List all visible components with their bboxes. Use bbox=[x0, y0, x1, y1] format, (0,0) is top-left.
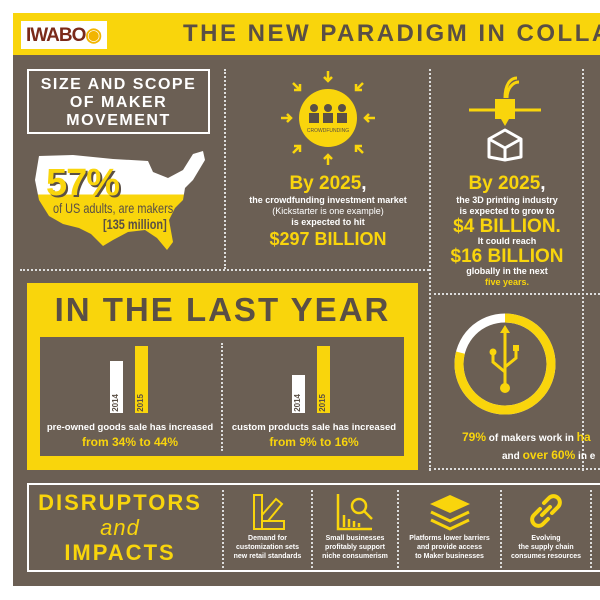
US map with stat bbox=[35, 151, 205, 250]
item: customization: customization sets bbox=[236, 544, 299, 551]
bar chart: custom products: 2014 bbox=[293, 394, 302, 412]
item: supply chain: consumes resources bbox=[511, 553, 581, 560]
item: customization: new retail standards bbox=[234, 553, 301, 560]
inner bar charts: from 34% to 44% bbox=[82, 435, 178, 449]
logo bbox=[21, 21, 107, 49]
heading: and bbox=[100, 515, 140, 540]
item: platforms: and provide access bbox=[417, 544, 482, 551]
bar chart: custom products bbox=[292, 375, 305, 413]
header bar bbox=[13, 13, 600, 55]
text: crowdfunding stat bbox=[249, 173, 407, 249]
text: crowdfunding stat: the crowdfunding investment market bbox=[249, 195, 407, 205]
heading: DISRUPTORS bbox=[38, 490, 202, 515]
text: 3D printing stat bbox=[450, 173, 563, 287]
title: THE NEW PARADIGM IN COLLA bbox=[183, 20, 600, 47]
text: crowdfunding stat: By 2025, bbox=[289, 173, 367, 194]
donut chart: USB bbox=[454, 314, 556, 414]
US map with stat: of US adults, are makers bbox=[53, 200, 173, 216]
text: makers stat: and over 60% in e bbox=[502, 448, 595, 462]
text: 3D printing stat: $4 BILLION. bbox=[453, 216, 561, 237]
inner bar charts: 2015 bbox=[136, 394, 145, 412]
item: supply chain bbox=[511, 494, 581, 560]
text: crowdfunding stat: is expected to hit bbox=[291, 217, 365, 227]
item: customization: Demand for bbox=[248, 535, 287, 542]
US map with stat: 57% bbox=[46, 162, 119, 204]
US map with stat: [135 million] bbox=[103, 216, 167, 232]
item: platforms: Platforms lower barriers bbox=[409, 535, 490, 542]
text: makers stat: 79% of makers work in ha bbox=[462, 430, 591, 444]
icon: 3D printer bbox=[469, 76, 541, 162]
inner bar charts: pre-owned goods sale has increased bbox=[47, 422, 213, 433]
item: supply chain: the supply chain bbox=[518, 544, 574, 551]
item: small businesses: profitably support bbox=[325, 544, 385, 551]
item: small businesses bbox=[322, 494, 388, 560]
item: supply chain: Evolving bbox=[531, 535, 561, 542]
item: platforms: to Maker businesses bbox=[415, 553, 484, 560]
text: 3D printing stat: $16 BILLION bbox=[450, 246, 563, 267]
text: 3D printing stat: five years. bbox=[485, 277, 529, 287]
panel: disruptors and impacts bbox=[27, 483, 600, 572]
heading box: size and scope: SIZE AND SCOPE bbox=[41, 76, 196, 93]
heading box: size and scope: MOVEMENT bbox=[66, 112, 171, 129]
heading box: size and scope bbox=[27, 69, 210, 134]
item: customization bbox=[234, 494, 301, 560]
item: platforms bbox=[409, 495, 490, 560]
bar chart: pre-owned bbox=[110, 361, 123, 413]
text: 3D printing stat: is expected to grow to It could reach globally in the next bbox=[459, 206, 554, 276]
inner bar charts: 2015 bbox=[318, 394, 327, 412]
panel: in the last year bbox=[27, 283, 418, 470]
icon: crowdfunding bbox=[281, 71, 375, 165]
inner bar charts bbox=[40, 337, 404, 456]
heading: IMPACTS bbox=[64, 540, 176, 565]
text: crowdfunding stat: $297 BILLION bbox=[269, 229, 387, 249]
item: small businesses: Small businesses bbox=[326, 535, 384, 542]
heading box: size and scope: OF MAKER bbox=[70, 94, 167, 111]
inner bar charts: custom products sale has increased bbox=[232, 422, 396, 433]
text: makers stat bbox=[462, 430, 595, 462]
heading: IN THE LAST YEAR bbox=[55, 291, 390, 328]
bar chart: pre-owned: 2014 bbox=[111, 394, 120, 412]
heading bbox=[38, 490, 202, 565]
text: crowdfunding stat: (Kickstarter is one example) bbox=[272, 206, 384, 216]
logo: IWABO◉ bbox=[26, 25, 101, 46]
item: small businesses: niche consumerism bbox=[322, 553, 388, 560]
inner bar charts: from 9% to 16% bbox=[269, 435, 359, 449]
icon: crowdfunding: CROWDFUNDING bbox=[307, 128, 349, 134]
text: 3D printing stat: By 2025, bbox=[468, 173, 546, 194]
text: 3D printing stat: the 3D printing industry bbox=[456, 195, 558, 205]
